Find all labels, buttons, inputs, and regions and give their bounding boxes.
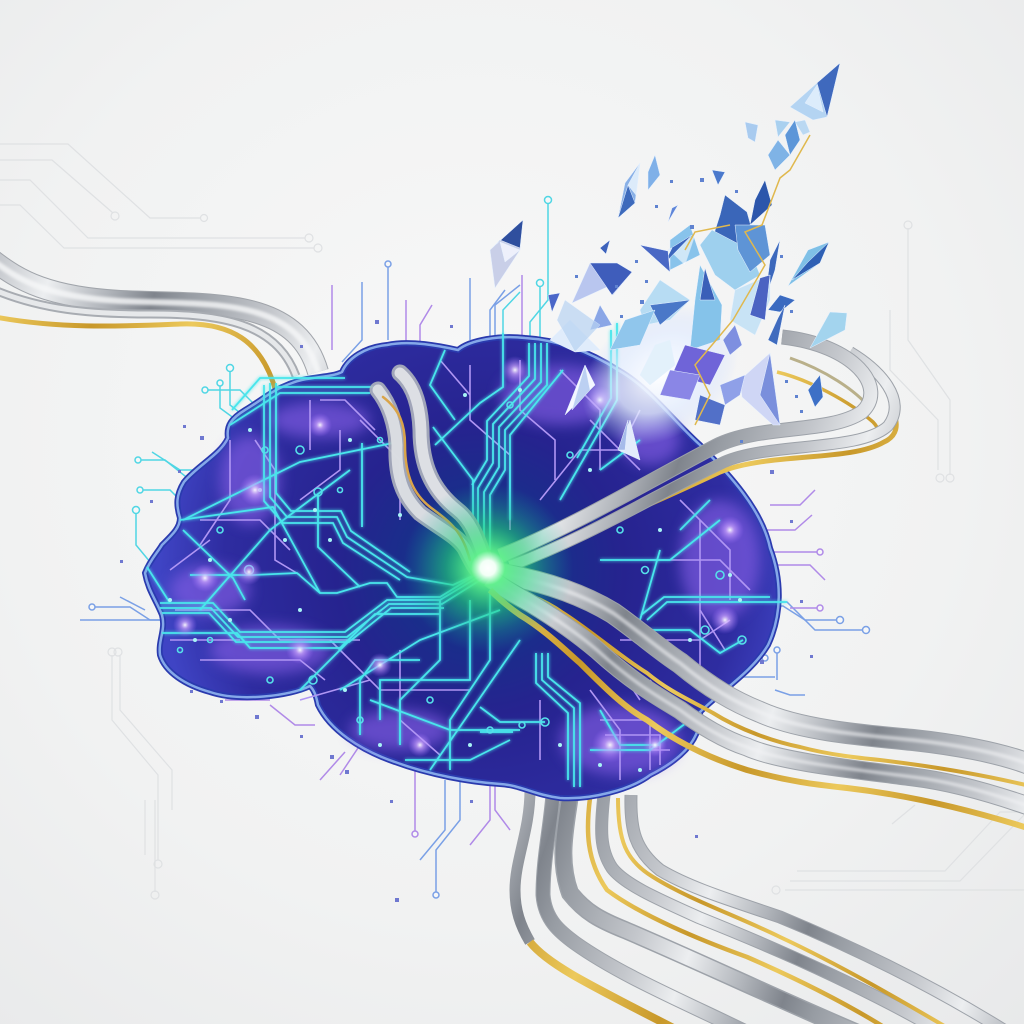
soft purple haze inside brain [170, 365, 760, 775]
inner circuit traces: purple [170, 360, 750, 780]
brain silhouette [145, 337, 779, 798]
outer circuit traces around the brain [80, 196, 870, 898]
burst glow at shatter point [555, 275, 765, 475]
inner upper cables with gold core [378, 373, 484, 568]
central green glow [403, 483, 573, 653]
top-left cable bundle [0, 258, 318, 392]
small shard fragments [575, 178, 803, 443]
bottom cable bundle [515, 790, 1010, 1024]
lower-right cable bundle [490, 572, 1024, 830]
inner circuit traces: cyan bundles [147, 323, 787, 787]
lightning filaments in shards [685, 135, 810, 425]
circuit node dots [168, 388, 742, 772]
purple sparkle glows [173, 356, 744, 763]
debris particles around brain [120, 320, 813, 902]
shattering crystal shards [490, 63, 847, 460]
faint background circuits [0, 144, 1024, 899]
circuit node rings [178, 402, 746, 733]
right-upper cable bundle [500, 337, 896, 566]
